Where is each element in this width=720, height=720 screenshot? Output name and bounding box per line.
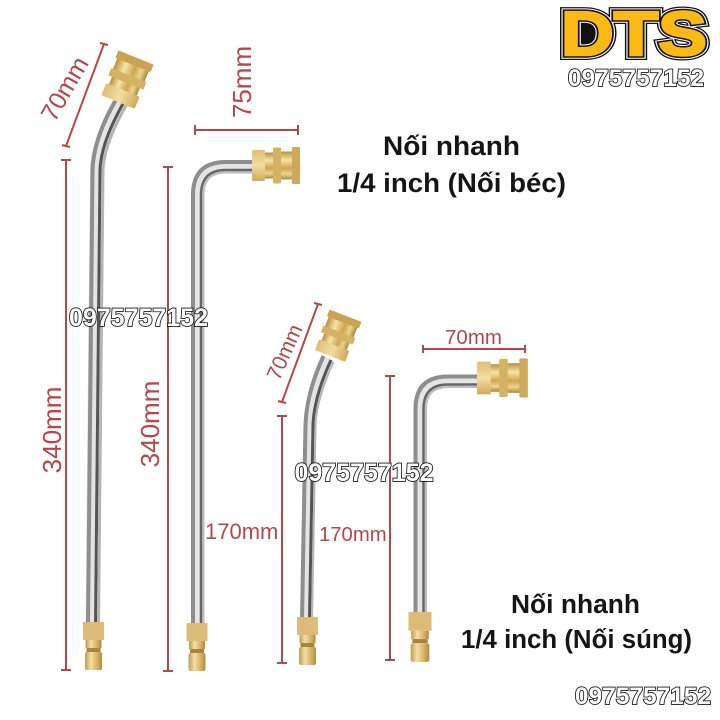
dimension: 70mm pipe 4 — [423, 326, 525, 353]
dimension: 70mm pipe 3 — [263, 303, 322, 403]
heading: gun connector — [461, 591, 692, 654]
coupler 3 — [314, 310, 361, 362]
logo: DTS: DTS — [561, 0, 707, 69]
dimension: 75mm pipe 2: 75mm — [227, 46, 257, 118]
watermark phone: centre: 0975757152 — [294, 459, 434, 487]
heading: nozzle connector — [337, 131, 566, 198]
coupler 4 — [477, 358, 528, 398]
heading: nozzle connector: 1/4 inch (Nối béc) — [337, 168, 566, 198]
dimension: 75mm pipe 2 — [195, 46, 298, 135]
dimension: 340mm pipe 1: 340mm — [37, 387, 67, 473]
dimension: 340mm pipe 2: 340mm — [135, 381, 165, 467]
watermark phone: left: 0975757152 — [69, 304, 208, 332]
dimension: 170mm pipe 4 — [319, 376, 395, 660]
dimension: 70mm pipe 1: 70mm — [36, 52, 95, 126]
dimension: 340mm pipe 2 — [135, 167, 173, 671]
logo: DTS: DTS — [561, 0, 707, 69]
dimension: 170mm pipe 3 — [205, 416, 287, 663]
plug 3 — [297, 617, 318, 665]
dimension: 70mm pipe 4: 70mm — [445, 326, 502, 349]
heading: gun connector: Nối nhanh — [511, 591, 640, 619]
dimension: 340mm pipe 1 — [37, 160, 71, 670]
coupler 1 — [100, 50, 154, 109]
pipe 2: right-angle long lance — [193, 162, 254, 625]
plug 4 — [408, 612, 432, 662]
pipe 4: right-angle short lance — [416, 376, 479, 615]
dimension: 70mm pipe 3: 70mm — [263, 321, 307, 384]
heading: nozzle connector: Nối nhanh — [383, 131, 520, 161]
plug 2 — [186, 623, 208, 671]
dimension: 170mm pipe 3: 170mm — [205, 519, 278, 544]
dimension: 170mm pipe 4: 170mm — [319, 524, 387, 546]
logo: DTS: DTS — [561, 0, 707, 69]
pipe 1: angled long lance — [88, 98, 127, 625]
plug 1 — [83, 622, 104, 670]
coupler 2 — [252, 147, 300, 184]
dimension: 70mm pipe 1 — [36, 43, 108, 147]
heading: gun connector: 1/4 inch (Nối súng) — [461, 626, 692, 654]
watermark phone: top right: 0975757152 — [568, 65, 704, 92]
logo: DTS: DTS — [561, 0, 707, 69]
pipe 3: angled short lance — [302, 356, 334, 620]
watermark phone: bottom right: 0975757152 — [575, 683, 711, 710]
